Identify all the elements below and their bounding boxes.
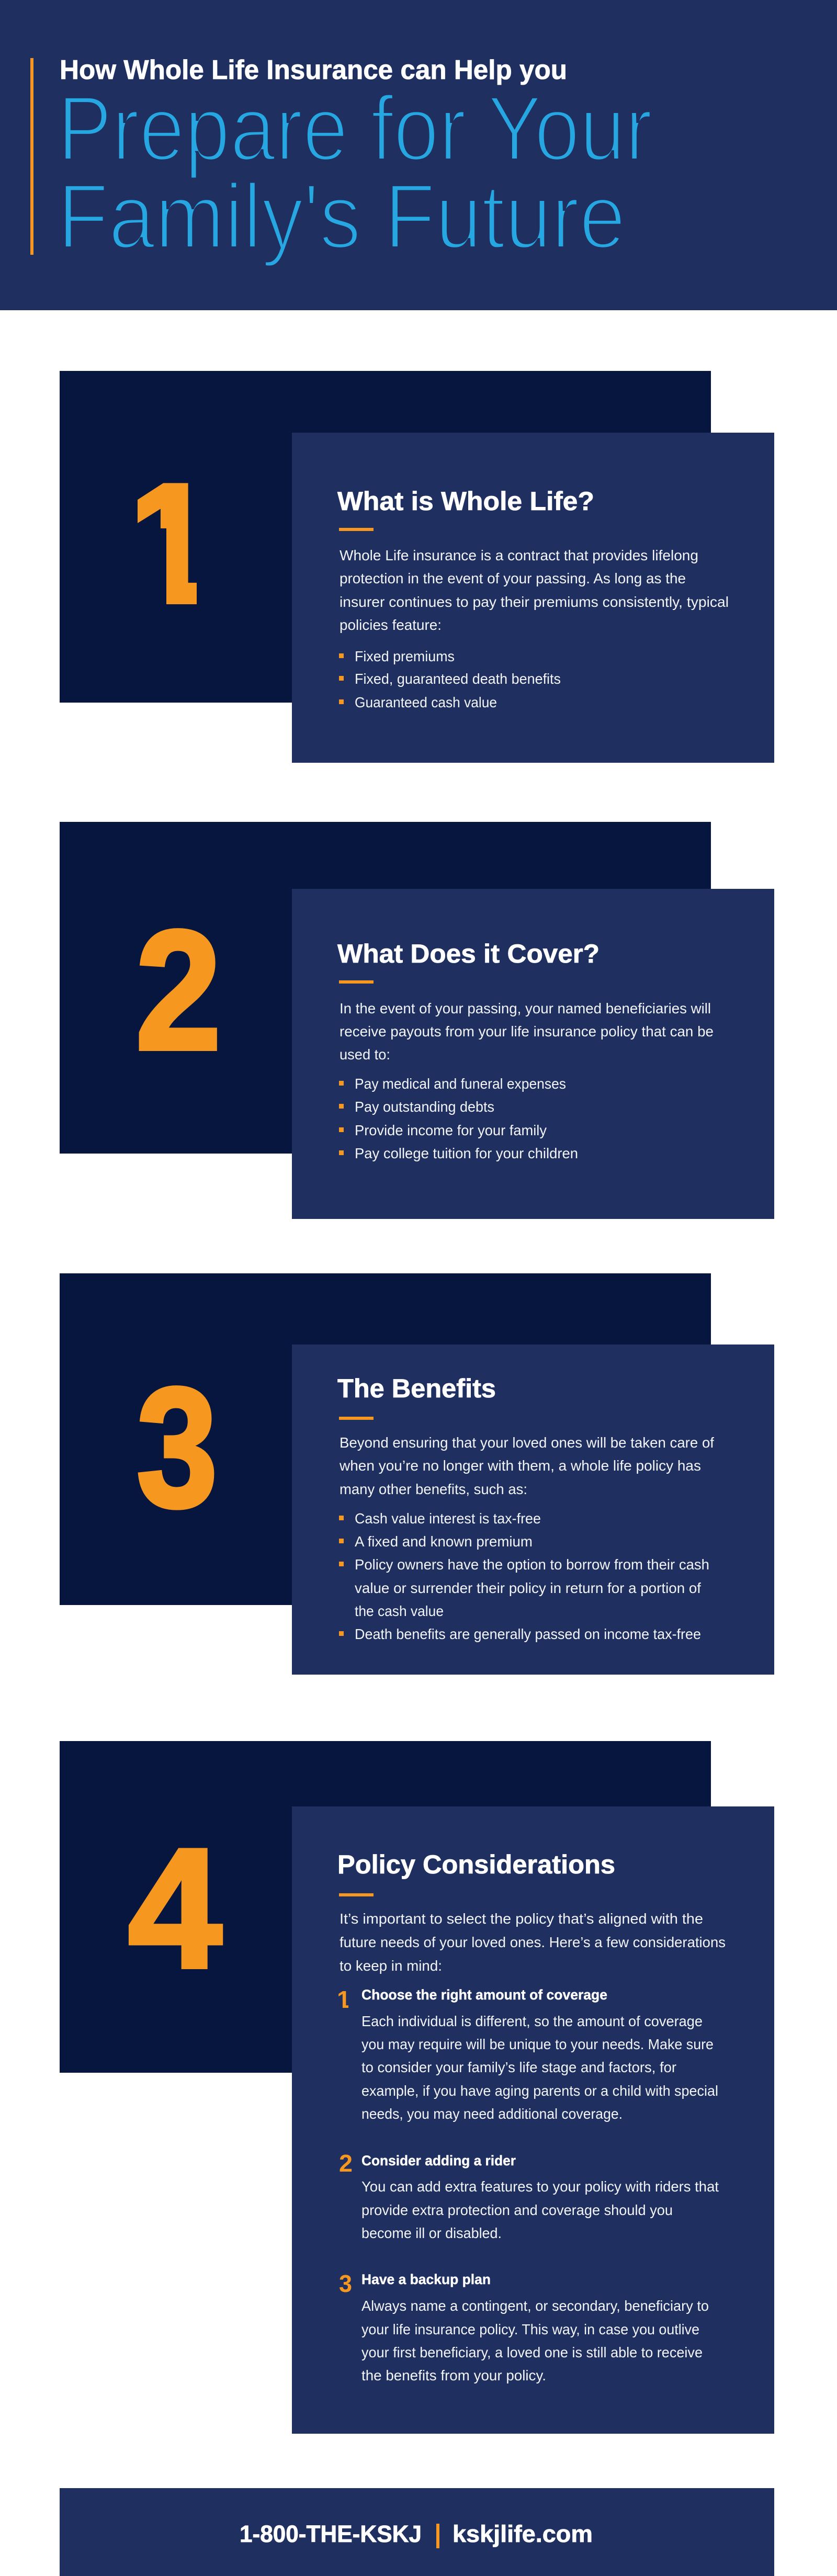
intro text: Whole Life insurance is a contract that provides lifelong	[340, 547, 698, 563]
bullet list: Death benefits are generally passed on income tax-free	[355, 1626, 701, 1642]
footer	[60, 2488, 774, 2576]
heading rule	[339, 528, 374, 531]
consideration 1: to consider your family’s life stage and factors, for	[361, 2059, 676, 2075]
consideration 1: you may require will be unique to your needs. Make sure	[361, 2036, 714, 2052]
header accent bar	[30, 58, 33, 255]
bullet list: Cash value interest is tax-free	[355, 1510, 541, 1527]
heading rule	[339, 1893, 374, 1896]
consideration 1: Choose the right amount of coverage	[361, 1987, 607, 2003]
section 4	[60, 1741, 774, 2434]
intro text: policies feature:	[340, 617, 442, 633]
subtitle: How Whole Life Insurance can Help you	[60, 55, 567, 85]
heading: The Benefits	[337, 1374, 496, 1403]
intro text: Beyond ensuring that your loved ones will be taken care of	[340, 1434, 714, 1451]
bullet list: value or surrender their policy in return for a portion of	[355, 1580, 701, 1596]
consideration 2: You can add extra features to your policy with riders that	[361, 2178, 719, 2195]
consideration 1: Each individual is different, so the amount of coverage	[361, 2013, 703, 2029]
number block 1	[60, 371, 711, 703]
section 3	[60, 1273, 774, 1675]
bullet list: Fixed premiums	[355, 648, 455, 664]
consideration 1	[337, 1986, 718, 2122]
consideration 3: your life insurance policy. This way, in case you outlive	[361, 2321, 699, 2337]
consideration 1: needs, you may need additional coverage.	[361, 2106, 623, 2122]
bullet list: the cash value	[355, 1603, 444, 1619]
intro text: protection in the event of your passing. As long as the	[340, 570, 686, 586]
bullet list	[339, 1076, 578, 1161]
bullet list: Guaranteed cash value	[355, 694, 497, 710]
intro text: It’s important to select the policy that’s aligned with the	[340, 1911, 703, 1927]
intro text	[340, 1911, 726, 1974]
section 2	[60, 822, 774, 1219]
phone number: 1-800-THE-KSKJ	[240, 2521, 422, 2547]
intro text	[340, 547, 729, 633]
intro text: insurer continues to pay their premiums consistently, typical	[340, 594, 729, 610]
bullet list: Fixed, guaranteed death benefits	[355, 671, 561, 687]
heading rule	[339, 980, 374, 984]
website: kskjlife.com	[453, 2521, 593, 2547]
number block 2: 2	[135, 895, 221, 1085]
bullet list: Policy owners have the option to borrow from their cash	[355, 1556, 709, 1573]
panel 4	[292, 1806, 774, 2434]
consideration 2: Consider adding a rider	[361, 2153, 516, 2168]
heading rule	[339, 1417, 374, 1420]
number block 4: 4	[128, 1813, 223, 2003]
consideration 2: become ill or disabled.	[361, 2225, 502, 2241]
consideration 3: Have a backup plan	[361, 2272, 491, 2287]
consideration 2: 2	[339, 2150, 353, 2177]
intro text: many other benefits, such as:	[340, 1481, 527, 1497]
number block 4	[60, 1741, 711, 2073]
title	[58, 77, 652, 268]
bullet list: Pay medical and funeral expenses	[355, 1076, 566, 1092]
consideration 3	[339, 2270, 709, 2383]
consideration 3: the benefits from your policy.	[361, 2367, 546, 2383]
section 1	[60, 371, 774, 763]
intro text: to keep in mind:	[340, 1958, 442, 1974]
bullet list: Pay college tuition for your children	[355, 1145, 578, 1161]
title: Prepare for Your	[58, 77, 652, 180]
number block 3: 3	[137, 1352, 218, 1542]
consideration 3: your first beneficiary, a loved one is still able to receive	[361, 2344, 703, 2360]
intro text	[340, 1000, 714, 1063]
header	[0, 0, 837, 310]
consideration 1: 1	[337, 1986, 350, 2013]
number block 3	[60, 1273, 711, 1605]
bullet list: Pay outstanding debts	[355, 1099, 494, 1115]
bullet list: Provide income for your family	[355, 1122, 547, 1138]
bullet list	[339, 648, 561, 710]
number block 2	[60, 822, 711, 1154]
title: Family's Future	[58, 165, 626, 268]
intro text: In the event of your passing, your named beneficiaries will	[340, 1000, 711, 1016]
consideration 1: example, if you have aging parents or a child with special	[361, 2083, 718, 2099]
bullet list	[339, 1510, 709, 1642]
heading: Policy Considerations	[337, 1850, 615, 1879]
panel 1	[292, 433, 774, 763]
consideration 3: Always name a contingent, or secondary, beneficiary to	[361, 2298, 709, 2314]
consideration 2: provide extra protection and coverage should you	[361, 2202, 673, 2218]
panel 2	[292, 889, 774, 1219]
bullet list: A fixed and known premium	[355, 1533, 533, 1550]
number block 1: 1	[123, 448, 218, 638]
consideration 3: 3	[339, 2270, 352, 2297]
consideration 2	[339, 2150, 719, 2241]
intro text	[339, 1434, 714, 1497]
intro text: used to:	[340, 1046, 390, 1063]
panel 3	[292, 1345, 774, 1675]
intro text: receive payouts from your life insurance policy that can be	[340, 1023, 714, 1040]
heading: What is Whole Life?	[337, 487, 594, 516]
heading: What Does it Cover?	[337, 939, 600, 968]
intro text: future needs of your loved ones. Here’s a few considerations	[340, 1934, 726, 1950]
intro text: when you’re no longer with them, a whole life policy has	[339, 1458, 701, 1474]
footer divider	[436, 2524, 439, 2548]
